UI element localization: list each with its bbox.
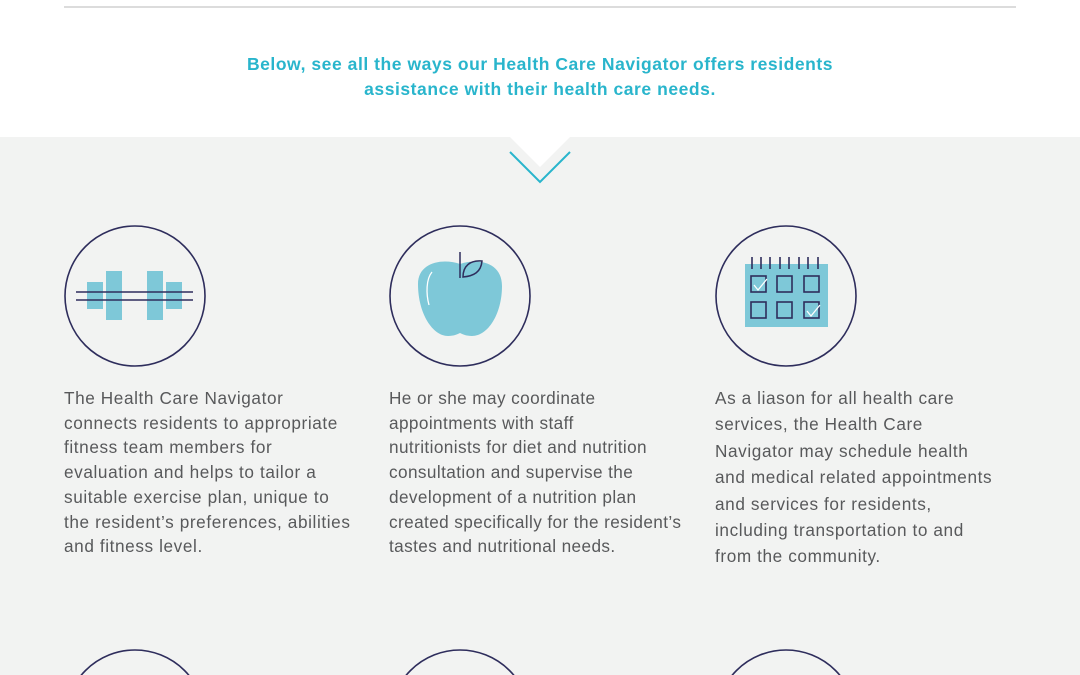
arrow: chevron [509,137,571,184]
bottom circles row [80,649,841,675]
intro heading: Below, see all the ways our Health Care Navigator offers residents [247,54,833,74]
top rule [64,6,1016,8]
grey panel [0,137,1080,675]
text: fitness: evaluation and helps to tailor a [64,462,316,482]
text: scheduling: and services for residents, [715,494,932,514]
text: scheduling: As a liason for all health care [715,388,954,408]
icon: calendar [715,225,857,367]
text: fitness: The Health Care Navigator [64,388,283,408]
text: nutrition: tastes and nutritional needs. [389,536,616,556]
text: scheduling [715,388,992,566]
text: nutrition: appointments with staff [389,413,574,433]
icon: apple [389,225,531,367]
text: nutrition: development of a nutrition plan [389,487,636,507]
text: fitness: the resident’s preferences, abilities [64,512,351,532]
text: fitness: suitable exercise plan, unique to [64,487,329,507]
text: scheduling: and medical related appointments [715,467,992,487]
text: nutrition [389,388,681,556]
text: scheduling: including transportation to and [715,520,964,540]
icon: dumbbell [64,225,206,367]
text: nutrition: created specifically for the resident’s [389,512,681,532]
text: scheduling: from the community. [715,546,881,566]
text: scheduling: services, the Health Care [715,414,923,434]
text: nutrition: consultation and supervise the [389,462,633,482]
text: scheduling: Navigator may schedule health [715,441,968,461]
text: nutrition: He or she may coordinate [389,388,595,408]
text: fitness: fitness team members for [64,437,272,457]
intro heading: assistance with their health care needs. [364,79,716,99]
text: fitness [64,388,351,556]
intro heading [247,54,833,99]
text: nutrition: nutritionists for diet and nutrition [389,437,647,457]
text: fitness: connects residents to appropriate [64,413,338,433]
text: fitness: and fitness level. [64,536,203,556]
